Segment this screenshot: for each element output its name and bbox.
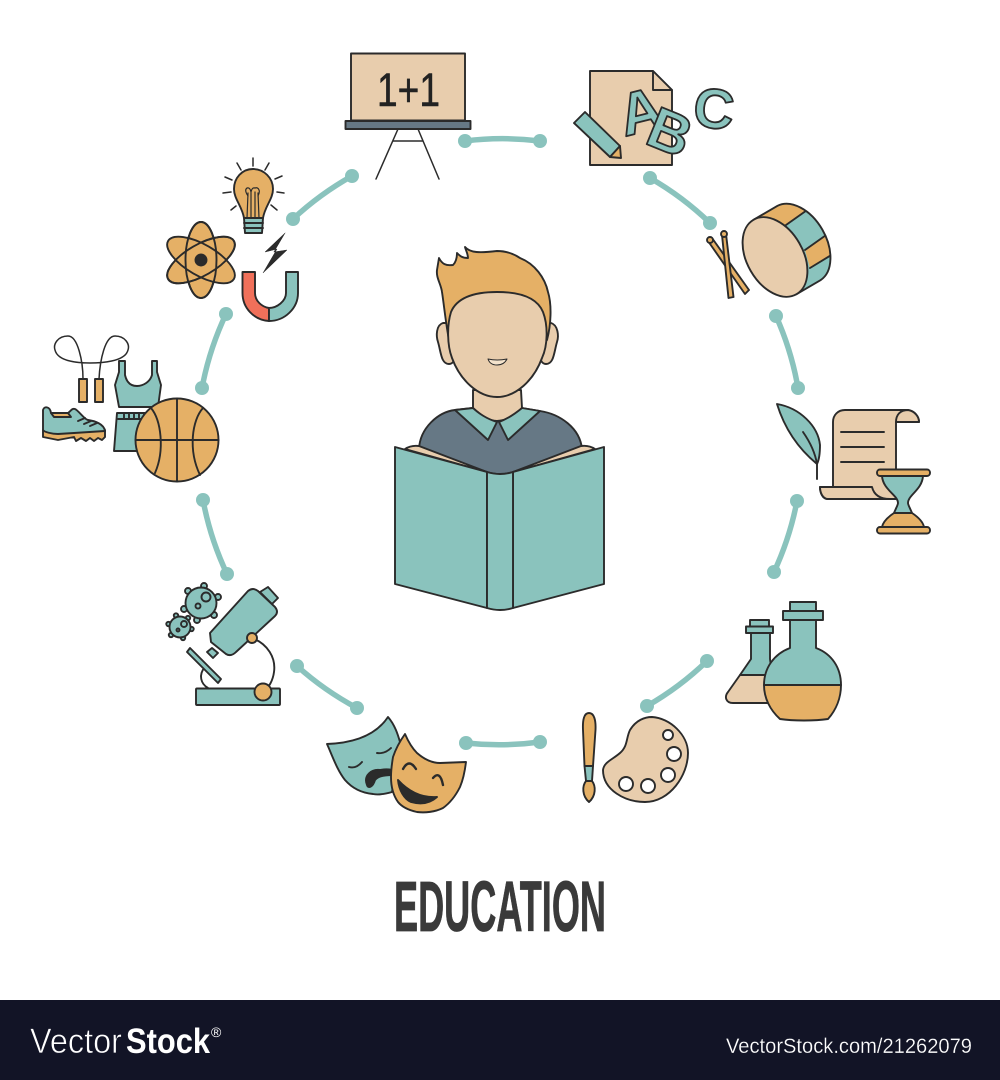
icon: quill, scroll and hourglass [777,404,930,534]
icon: theatre masks [327,717,466,812]
neck [473,390,522,421]
icon: drum and sticks [706,202,832,299]
shoe [43,407,105,441]
icon: ABC paper and pencil: C [691,75,737,142]
footer logo: ® [211,1024,222,1040]
connectors ring [195,134,805,750]
smile [488,359,507,365]
footer bar [0,1000,1000,1080]
collar [455,408,540,440]
footer logo: Stock [126,1022,210,1061]
icon: sport items [43,336,218,482]
footer logo: Vector [30,1022,122,1061]
shorts [114,413,155,451]
footer image id: VectorStock.com/21262079 [726,1035,972,1058]
book covers [395,447,487,608]
book pages [405,446,595,472]
icon: chemistry flasks [726,602,841,720]
icon: light bulb [223,158,284,233]
icon: ABC paper and pencil: A [612,74,670,149]
central figure: student reading a book [395,247,604,610]
face [448,292,547,397]
icon: microscope and germs [166,583,280,705]
icon: ABC paper and pencil: B [638,94,701,170]
ears [437,323,558,364]
icon: ABC paper and pencil [574,71,737,170]
hair [437,247,551,340]
shirt [419,408,582,474]
icon: paint palette and brush [583,713,688,802]
icon: magnet and spark [242,233,298,321]
jump rope [55,336,128,402]
title: EDUCATION [394,868,606,947]
tank top [115,361,161,407]
icon: atom [160,222,242,298]
icon: chalkboard with 1+1 [346,54,470,179]
basketball [136,398,218,482]
book spine [487,472,513,610]
icon: chalkboard with 1+1: 1+1 [377,63,440,116]
